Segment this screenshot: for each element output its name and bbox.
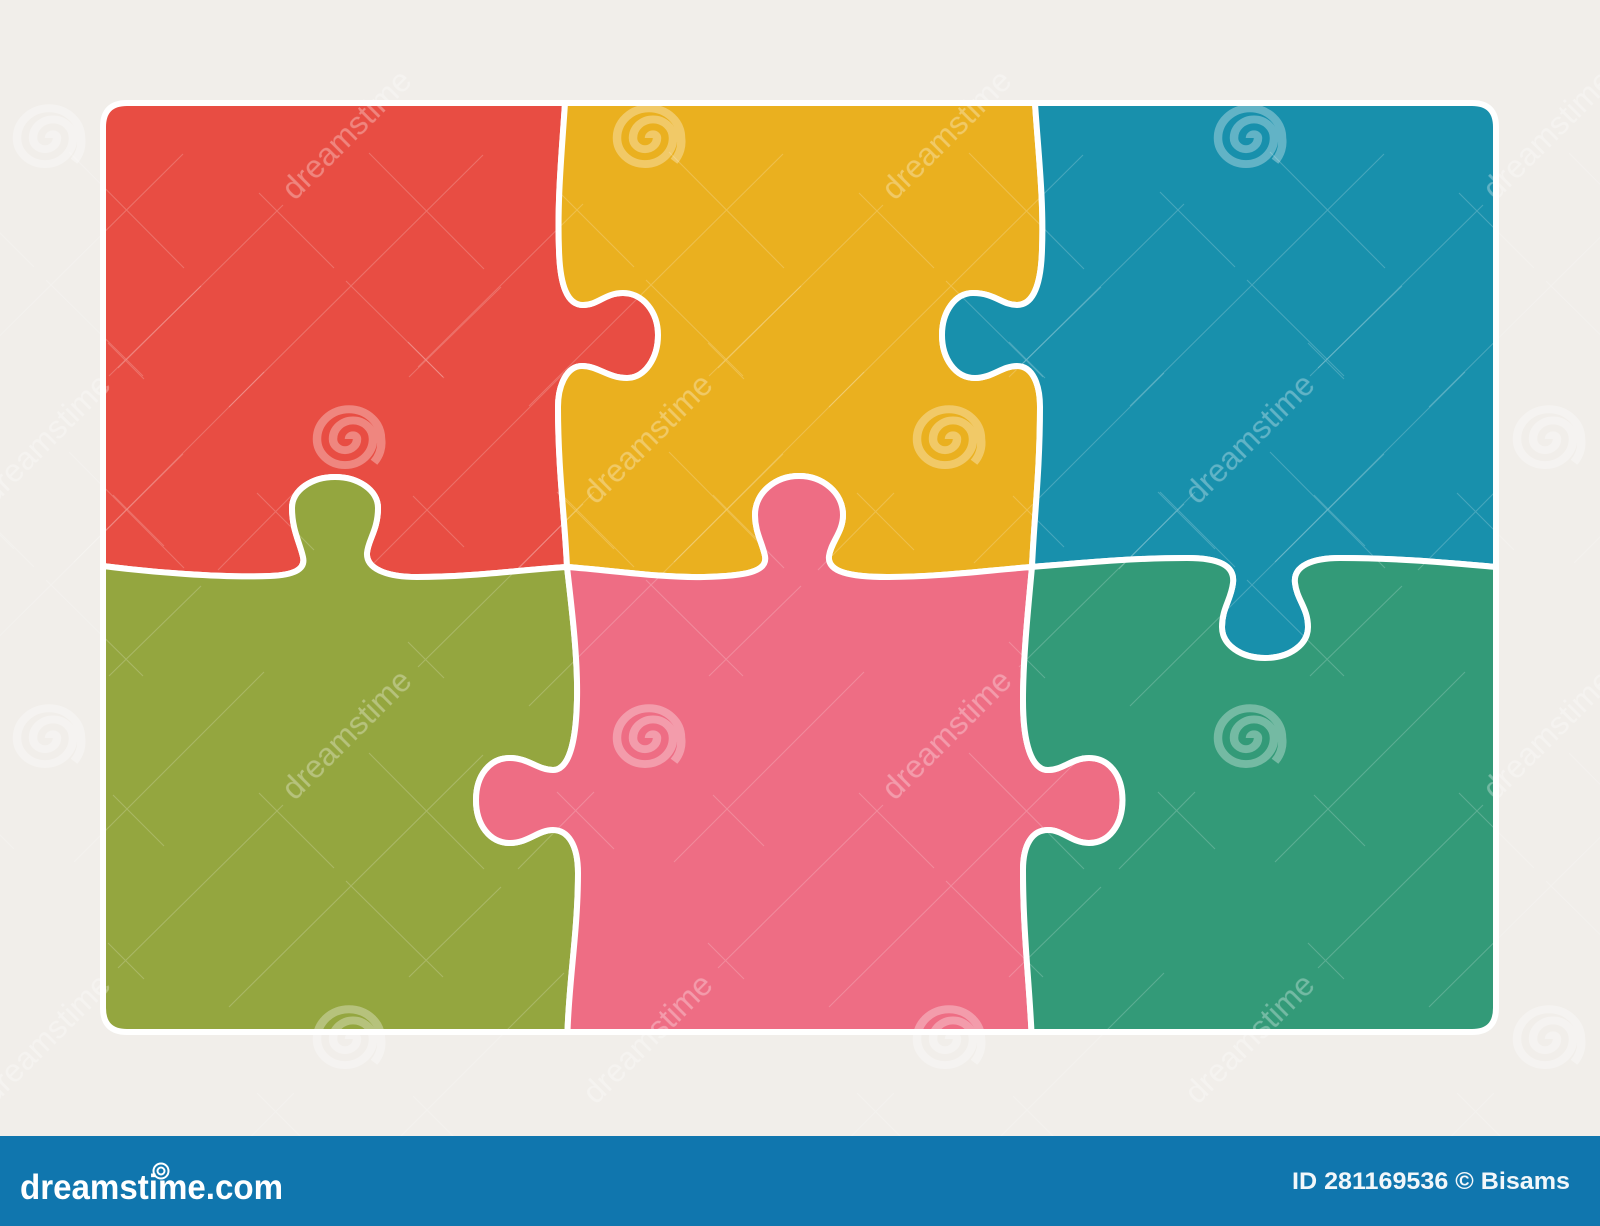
- footer image id and credit: ID 281169536 © Bisams: [1292, 1168, 1570, 1195]
- puzzle piece: red, top left: [103, 103, 658, 577]
- watermark overlay: spirals, hairlines and diagonal wordmarks: dreamstime: [1177, 366, 1321, 510]
- puzzle piece: blue, top right: [942, 103, 1496, 658]
- watermark overlay: spirals, hairlines and diagonal wordmarks: dreamstime: [575, 966, 719, 1110]
- puzzle: six interlocking pieces: [103, 103, 1496, 1032]
- puzzle piece: pink, bottom middle: [476, 476, 1122, 1032]
- icon: footer logo spiral: [154, 1164, 168, 1178]
- puzzle piece: olive green, bottom left: [103, 477, 578, 1032]
- watermark overlay: spirals, hairlines and diagonal wordmarks: dreamstime: [274, 62, 418, 206]
- watermark overlay: spirals, hairlines and diagonal wordmarks: dreamstime: [274, 662, 418, 806]
- watermark overlay: spirals, hairlines and diagonal wordmarks: dreamstime: [874, 62, 1018, 206]
- watermark overlay: spirals, hairlines and diagonal wordmarks: dreamstime: [1177, 966, 1321, 1110]
- puzzle piece: teal green, bottom right: [1023, 558, 1496, 1032]
- footer logo text: dreamstime.com: [20, 1168, 283, 1207]
- puzzle piece: yellow, top middle: [558, 103, 1042, 577]
- watermark overlay: spirals, hairlines and diagonal wordmarks: dreamstime: [874, 662, 1018, 806]
- footer banner: [0, 1136, 1600, 1226]
- watermark overlay: spirals, hairlines and diagonal wordmarks: dreamstime: [575, 366, 719, 510]
